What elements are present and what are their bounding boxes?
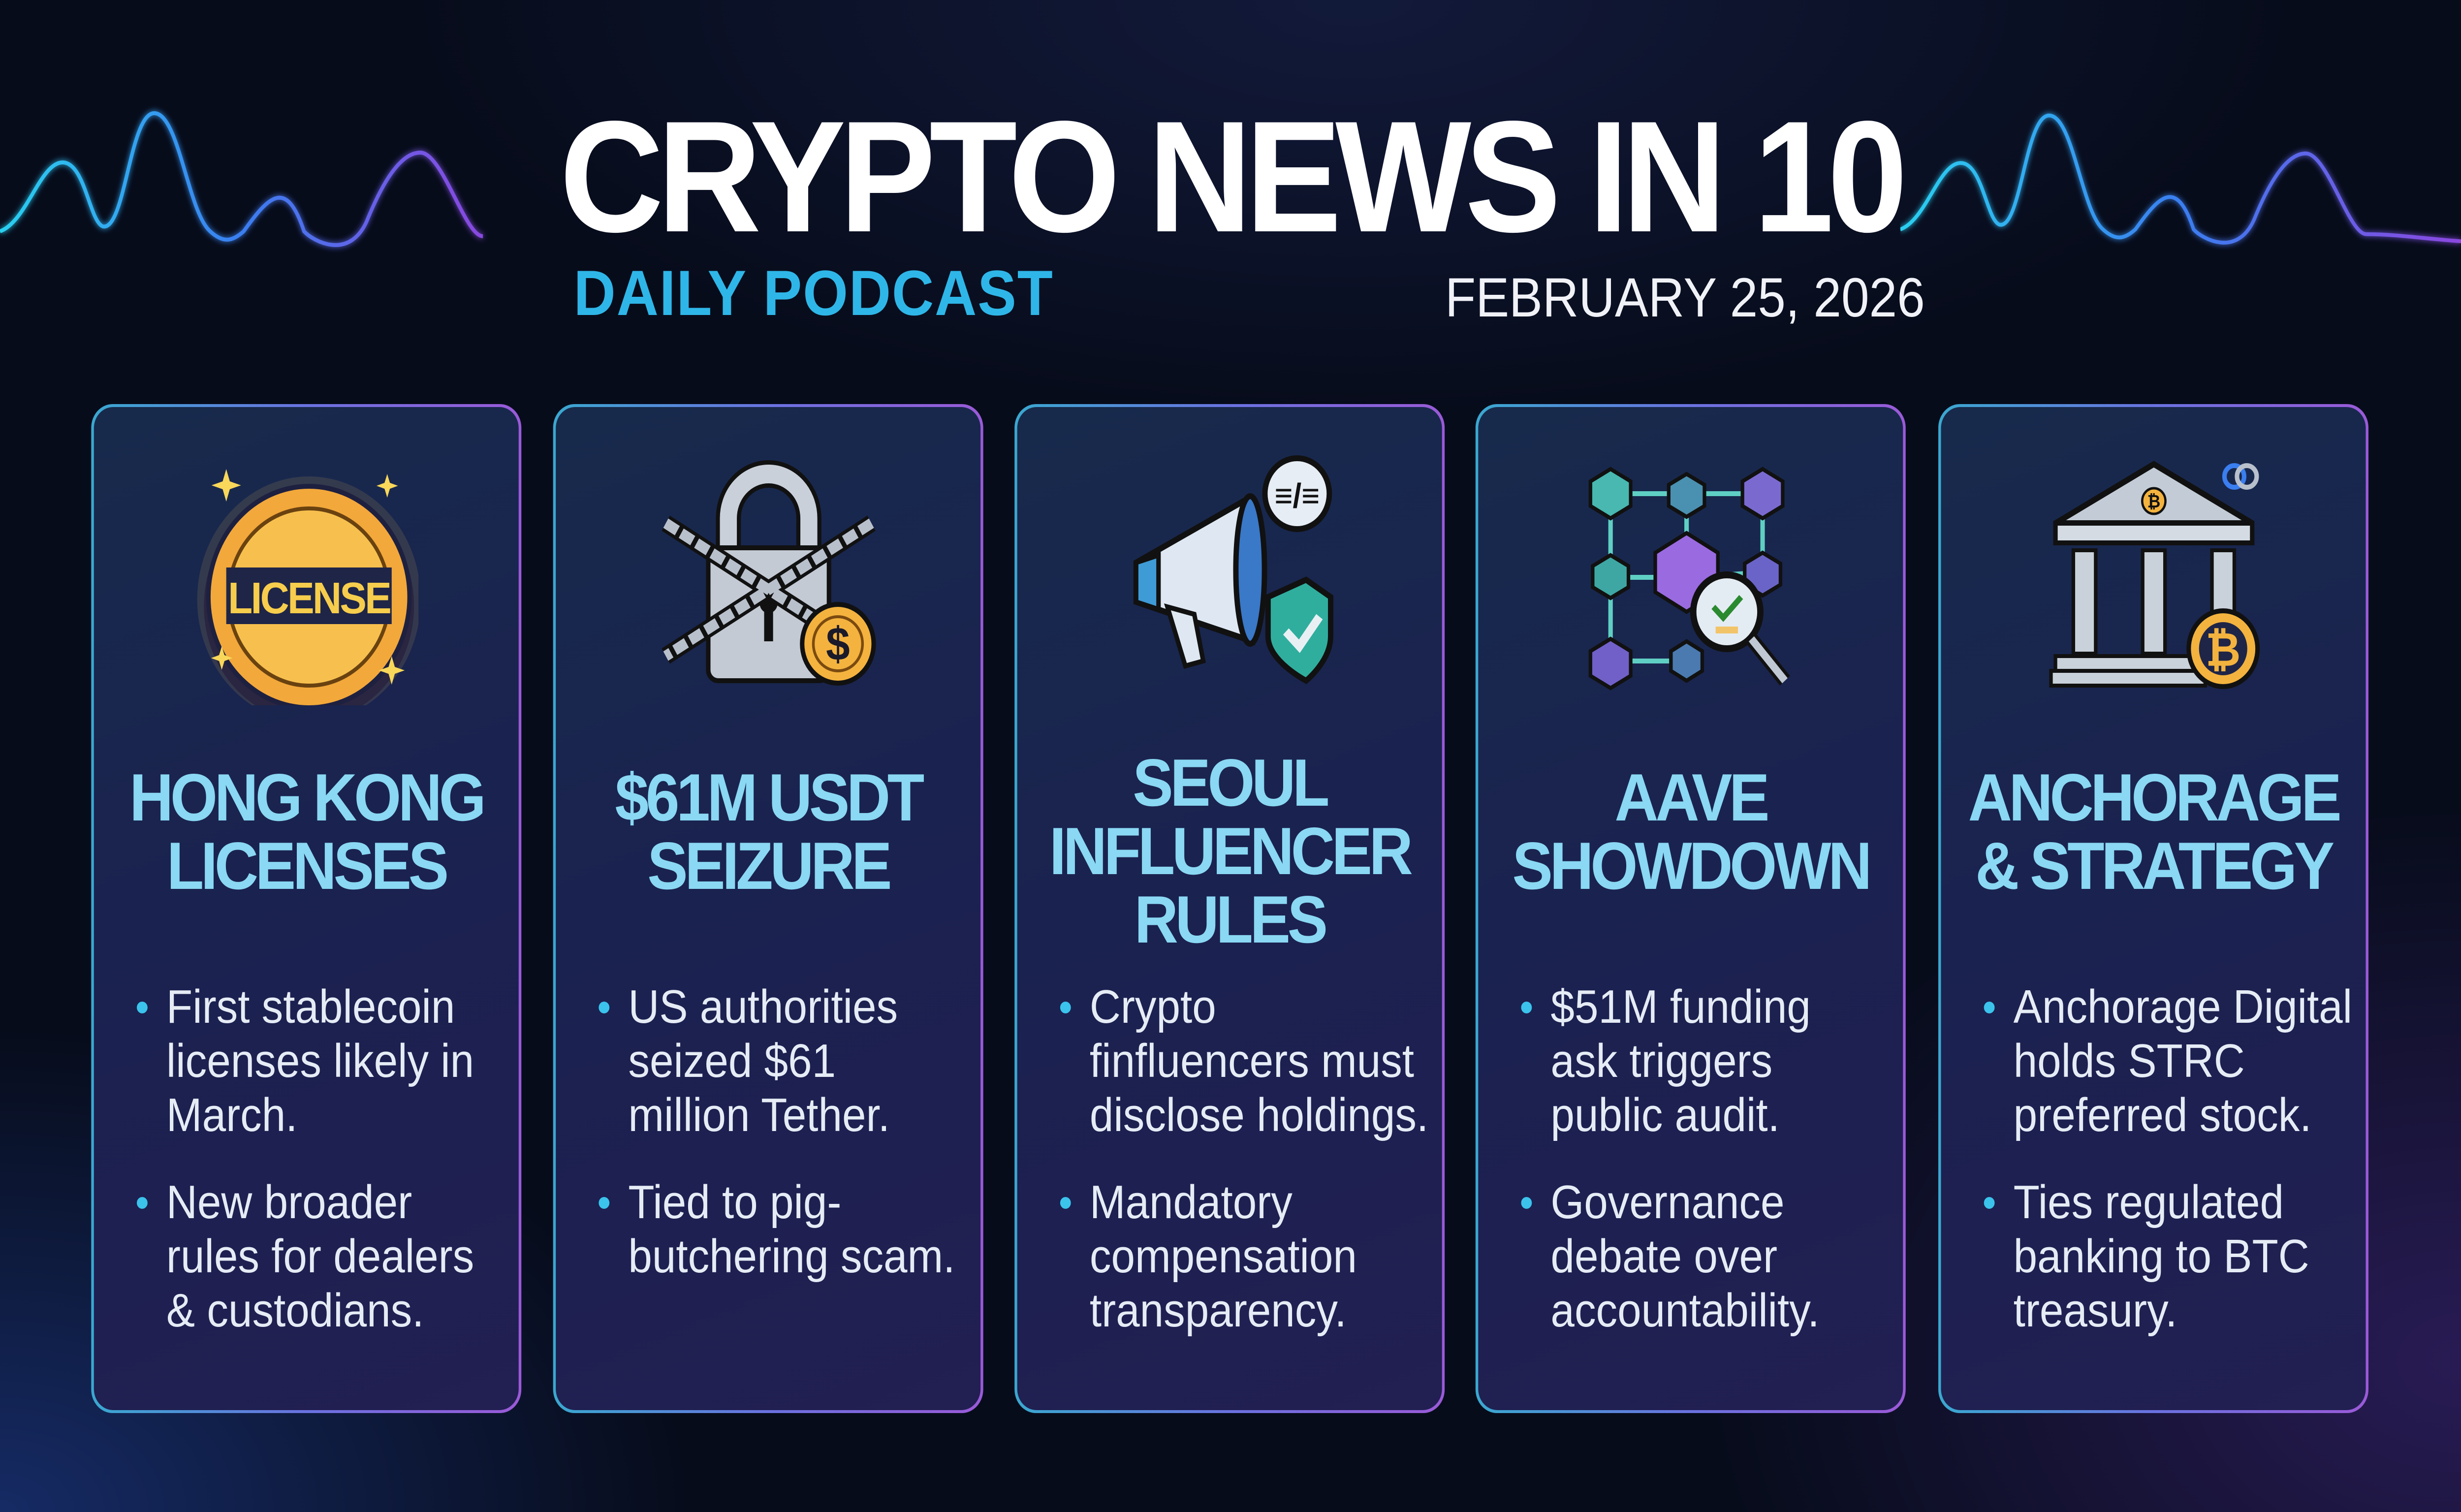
bullets: debate over (1550, 1230, 1777, 1283)
icon: network cubes with magnifier (1589, 467, 1790, 690)
heading: HONG KONG (129, 760, 483, 835)
bullets: butchering scam. (628, 1230, 955, 1283)
subtitle: daily podcast: DAILY PODCAST (574, 257, 1054, 329)
bullets: Governance (1550, 1176, 1785, 1228)
heading: $61M USDT (615, 760, 921, 835)
heading (1968, 760, 2339, 903)
bullets: rules for dealers (166, 1230, 474, 1283)
bullets: Mandatory (1090, 1176, 1293, 1228)
bullets: compensation (1090, 1230, 1357, 1283)
bullets (1060, 980, 1428, 1337)
heading: SHOWDOWN (1512, 828, 1869, 903)
icon: bank with bitcoin (2049, 461, 2260, 689)
decorative waves right (1900, 109, 2461, 249)
icon: license coin (197, 469, 418, 705)
bullets: & custodians. (166, 1284, 424, 1337)
heading: SEIZURE (647, 828, 889, 903)
heading: RULES (1135, 882, 1325, 957)
panel: usdt seizure (553, 404, 983, 1413)
icon: padlock with chains and coin (662, 460, 876, 686)
bullets: First stablecoin (166, 980, 455, 1033)
bullets: treasury. (2014, 1284, 2177, 1337)
title: CRYPTO NEWS IN 10 (560, 89, 1901, 265)
bullets: licenses likely in (166, 1035, 474, 1087)
bullets: Crypto (1090, 980, 1216, 1033)
heading: LICENSES (167, 828, 446, 903)
heading (615, 760, 924, 903)
bullets: banking to BTC (2014, 1230, 2309, 1283)
panel: seoul influencer rules (1014, 404, 1445, 1413)
bullets: seized $61 (628, 1035, 836, 1087)
bullets: March. (166, 1089, 297, 1141)
bullets: Tied to pig- (628, 1176, 841, 1228)
bullets: disclose holdings. (1090, 1089, 1428, 1141)
heading: AAVE (1614, 760, 1767, 835)
bullets: finfluencers must (1090, 1035, 1414, 1087)
bullets (137, 980, 474, 1337)
date: FEBRUARY 25, 2026 (1445, 267, 1925, 328)
bullets: public audit. (1550, 1089, 1780, 1141)
icon: megaphone shield and chat: ≡/≡ (1274, 476, 1320, 515)
heading (129, 760, 483, 903)
bullets: accountability. (1550, 1284, 1820, 1337)
panel: anchorage & strategy (1938, 404, 2368, 1413)
heading: ANCHORAGE (1968, 760, 2338, 835)
decorative waves left (0, 106, 486, 252)
bullets: million Tether. (628, 1089, 890, 1141)
icon: bank with bitcoin: ₿ (2206, 624, 2240, 676)
bullets: Anchorage Digital (2014, 980, 2352, 1033)
bullets (1984, 980, 2352, 1337)
bullets (599, 980, 955, 1283)
bullets (1521, 980, 1820, 1337)
bullets: Ties regulated (2014, 1176, 2284, 1228)
icon: license coin: LICENSE (228, 574, 390, 623)
heading (1512, 760, 1869, 903)
bullets: ask triggers (1550, 1035, 1772, 1087)
heading (1049, 745, 1412, 957)
bullets: transparency. (1090, 1284, 1347, 1337)
bullets: New broader (166, 1176, 412, 1228)
icon: padlock with chains and coin: $ (826, 618, 850, 670)
heading: & STRATEGY (1975, 828, 2332, 903)
heading: INFLUENCER (1049, 814, 1410, 888)
panel: hong kong licenses (91, 404, 521, 1413)
heading: SEOUL (1133, 745, 1326, 820)
icon: megaphone shield and chat (1133, 455, 1333, 684)
bullets: preferred stock. (2014, 1089, 2312, 1141)
bullets: holds STRC (2014, 1035, 2245, 1087)
panel: aave showdown (1476, 404, 1906, 1413)
icon: bank with bitcoin: ₿ (2147, 491, 2160, 511)
bullets: $51M funding (1550, 980, 1811, 1033)
bullets: US authorities (628, 980, 898, 1033)
